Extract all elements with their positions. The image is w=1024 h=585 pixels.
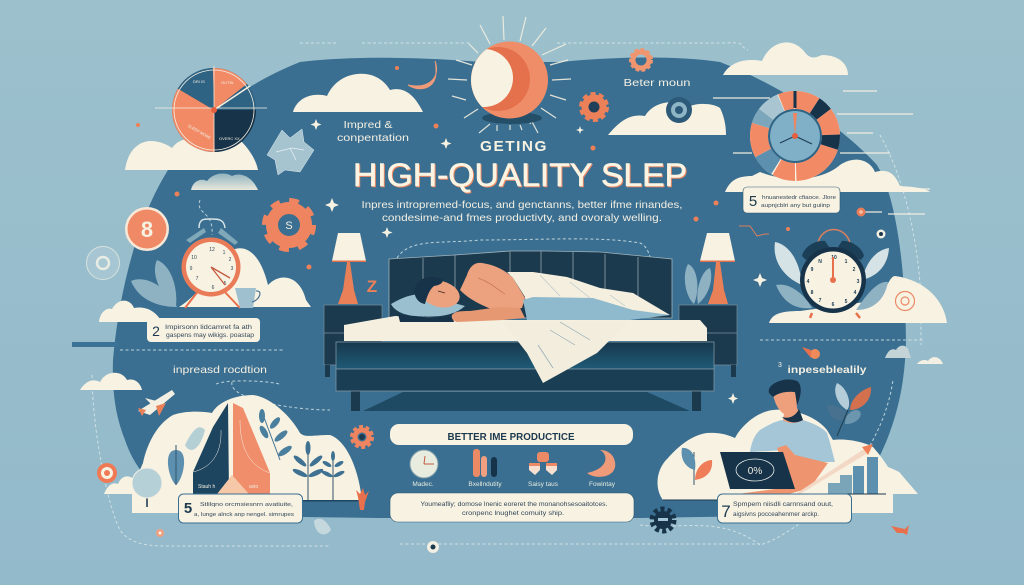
icon labels: Saisy taus [528, 481, 559, 488]
pie small labels: OVERC XX [219, 136, 240, 141]
alarm clock: navy: 2 [853, 267, 856, 273]
mountain chart: avio [249, 484, 258, 490]
icon labels: Bxellndutity [468, 481, 502, 488]
mountain chart [193, 403, 270, 494]
callout 5 left: Stlilqno orcmsiesnrn avatiuite, [200, 502, 293, 508]
cloud behind left alarm clock [179, 248, 311, 307]
alarm clock: coral: 6 [212, 285, 215, 291]
gear: left coral: S [285, 220, 293, 232]
icon: number 8 badge: 8 [141, 217, 153, 242]
coral fish icon [891, 525, 909, 535]
callout 7: aigsivns pocceahenmer arckp. [733, 511, 819, 518]
alarm clock: coral: 1 [223, 250, 226, 256]
alarm clock: navy: 9 [811, 267, 814, 273]
pie small labels [187, 79, 240, 141]
alarm clock: navy: N [818, 259, 822, 265]
alarm clock: coral: 2 [229, 257, 232, 263]
pie chart clock [155, 66, 267, 158]
icon: cubes [529, 452, 557, 475]
small white swirl icon [314, 519, 331, 534]
icon: wall clock [410, 450, 438, 478]
callout 7 [718, 494, 852, 523]
rosette icon [896, 292, 914, 310]
callout 5 left [178, 494, 302, 523]
alarm clock: coral: 7 [196, 276, 199, 282]
trees [168, 409, 345, 500]
sprout left of laptop [682, 448, 712, 485]
callout 5 left: 5 [184, 500, 192, 517]
pillow [391, 294, 465, 317]
label: better mood: Beter moun [624, 77, 691, 89]
bottom text panel: cronpenc lnughet comuity ship. [462, 510, 564, 517]
small ring icon [876, 230, 886, 238]
sun with crescent [448, 16, 571, 133]
coral toggle [856, 208, 866, 216]
airplane [138, 390, 175, 416]
icon: target button [666, 97, 692, 123]
person at laptop: 0% [748, 466, 762, 477]
hair [769, 379, 801, 405]
laptop [720, 452, 795, 489]
section: increased production heading: inpreasd rocdtion [173, 364, 267, 376]
blanket drape [503, 322, 628, 383]
person at laptop [720, 379, 835, 495]
bed [80, 251, 943, 553]
alarm clock: coral: 10 [191, 255, 197, 261]
title description [362, 199, 682, 224]
bottom text panel: Youmeafliy; domose lnenic eoreret the monanohsesoaitotces. [420, 501, 608, 508]
gear: center right [581, 94, 607, 120]
alarm clock: coral [182, 219, 240, 308]
growth bars and arrow [797, 444, 886, 494]
cloud under donut clock [725, 160, 930, 192]
shirt [750, 418, 835, 462]
callout 5 right [743, 187, 840, 213]
plant behind right lamp [685, 264, 711, 304]
title eyebrow: GETING [480, 138, 548, 155]
alarm clock: navy: 4 [807, 279, 810, 285]
main title: HIGH-QUALITY SLEP [354, 158, 688, 194]
alarm clock: navy: 8 [811, 290, 814, 296]
alarm clock: coral: 3 [231, 266, 234, 272]
small nav dot [427, 541, 439, 553]
bed nightstands [324, 305, 737, 377]
section: improved reliability heading: inpeseblealily [788, 364, 867, 376]
cloud: top right of title [608, 102, 726, 135]
blanket folds [540, 275, 625, 306]
callout 2: 2 [152, 323, 160, 339]
sparkles and small decorations [310, 119, 767, 404]
callout 2: gaspens may wikigs. poastap [166, 333, 255, 339]
closed eye [438, 291, 445, 293]
sleep Z: Z [367, 277, 377, 296]
arm crease [478, 278, 505, 294]
pie wedges [193, 89, 235, 131]
gear: small top [630, 50, 652, 70]
callout 5 right: hnuanestedr cfiaoce. Jlore [762, 195, 836, 201]
large cream cloud left bottom [132, 395, 362, 513]
mountain chart: Stauh h [198, 484, 215, 490]
sun rays [448, 16, 571, 133]
cloud under pie clock [125, 139, 258, 170]
bed legs [351, 391, 701, 411]
label: improved concentration: Impred & [344, 119, 392, 131]
alarm clock: navy: 10 [831, 255, 837, 261]
arms and lap [730, 445, 828, 495]
bed shadow [363, 392, 690, 411]
leaves near reliability heading [827, 383, 871, 436]
main title: HIGH-QUALITY SLEP [353, 157, 687, 193]
streak lines [713, 91, 930, 214]
small coral dot [156, 529, 164, 537]
comet icon [802, 347, 820, 359]
pie small labels: DRI IS [193, 79, 205, 84]
blanket upper [507, 272, 670, 320]
mattress [344, 316, 707, 341]
leaves beside navy clock [775, 242, 889, 310]
callout 2 [147, 318, 260, 342]
hair [415, 277, 443, 304]
alarm clock: navy: 1 [845, 259, 848, 265]
icon labels: Madec. [412, 481, 434, 488]
lamp: right [700, 233, 735, 304]
pie small labels: OUTIN [221, 80, 234, 85]
blanket lower blue [523, 297, 670, 320]
label: improved concentration [337, 119, 409, 144]
title description: Inpres intropremed-focus, and genctanns, better ifme rinandes, [362, 199, 682, 211]
cloud: left bottom small [80, 373, 142, 390]
cloud base strip [295, 500, 363, 502]
icon labels [412, 481, 616, 488]
coral pin [97, 463, 117, 483]
torso and upper arm [460, 263, 525, 312]
callout 2: Impirsonn lidcamret fa ath [165, 325, 252, 331]
cloud under navy alarm clock [769, 276, 947, 323]
donut clock [750, 91, 840, 181]
title description: condesime-and fmes productivty, and ovoraly welling. [382, 212, 662, 224]
icon: crescent moon [587, 450, 615, 477]
cloud: top right [723, 42, 848, 75]
icon: glass ring [86, 246, 120, 280]
callout 7: 7 [721, 502, 731, 521]
alarm clock: coral: 9 [190, 266, 193, 272]
alarm clock: navy: 4 [854, 290, 857, 296]
title block [353, 138, 688, 194]
callout 5 right: aupnjcblri any but guiinp [761, 203, 830, 209]
gear: left coral [265, 201, 313, 249]
alarm clock: navy: 7 [819, 298, 822, 304]
icon: bars [473, 449, 497, 477]
gear: bottom left [352, 426, 372, 448]
small teal cloud [191, 173, 258, 190]
dark hollow under head [398, 314, 454, 322]
crumpled leaf [267, 129, 314, 175]
forearm and hand [452, 307, 525, 322]
dashed guide lines [92, 43, 923, 546]
bottom text panel [390, 493, 634, 522]
headboard [389, 251, 672, 318]
gear: navy bottom right [652, 509, 674, 531]
central blue blob background [113, 58, 906, 518]
icon labels: Fowintay [589, 481, 616, 488]
neck and face [773, 391, 803, 423]
alarm clock: navy: 5 [845, 299, 848, 305]
callout 5 right: 5 [749, 193, 757, 210]
squiggle line [739, 226, 769, 236]
decorative leaves left [131, 260, 177, 307]
moon [408, 61, 437, 89]
section: improved reliability heading: 3 [778, 362, 782, 369]
label: improved concentration: conpentation [337, 132, 409, 144]
callout 5 left: a, lunge alnck anp nengel. simrupes [194, 512, 294, 518]
lamp: left [332, 233, 366, 304]
beard [782, 409, 803, 422]
teacup [235, 288, 260, 308]
magnifier glass [132, 468, 162, 507]
teal strip [72, 342, 118, 347]
head [417, 277, 463, 311]
sleeping person [415, 263, 670, 383]
productivity banner: BETTER IME PRODUCTICE [448, 431, 574, 443]
section: improved reliability heading [778, 362, 867, 376]
cloud: top left of title [293, 74, 423, 112]
alarm clock: navy [800, 230, 866, 318]
icon: number 8 badge [125, 207, 169, 251]
productivity banner [390, 424, 633, 445]
callout 7: Spmpem niisdli carnnsand ouut, [733, 501, 833, 508]
alarm clock: coral: 5 [224, 281, 227, 287]
alarm clock: navy: 3 [857, 279, 860, 285]
small grey clouds right [885, 346, 943, 364]
cloud base line [663, 499, 717, 501]
pie small labels: SLEEP MORE [187, 123, 212, 140]
small coral hand icon [356, 488, 369, 510]
alarm clock: navy: 6 [832, 302, 835, 308]
alarm clock: coral: 12 [209, 247, 215, 253]
small cream cloud [104, 476, 135, 494]
bed base [336, 342, 714, 391]
small coral edged cloud [99, 301, 162, 322]
cloud behind person [658, 410, 918, 513]
